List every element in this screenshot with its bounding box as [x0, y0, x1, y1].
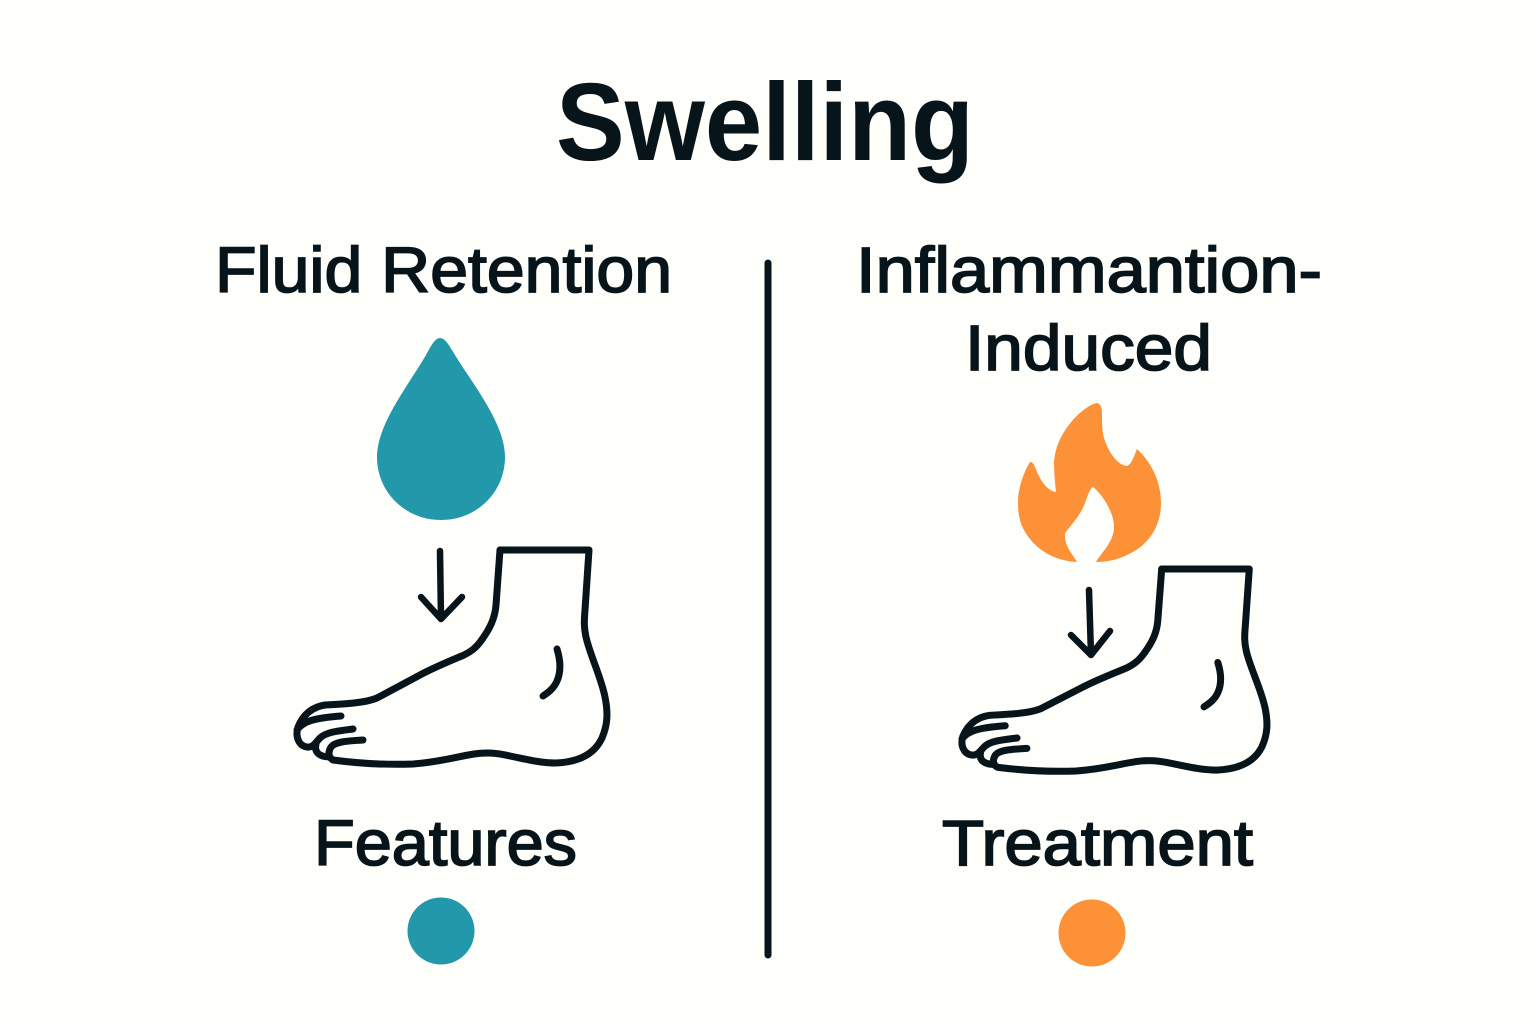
icon: water drop: [377, 338, 505, 520]
arrow: flame to foot: [1071, 590, 1110, 655]
heading: inflammantion-induced: Inflammantion-: [856, 234, 1322, 306]
heading: inflammantion-induced: Induced: [965, 312, 1212, 384]
dot: teal: [408, 898, 474, 964]
icon: foot: [962, 569, 1267, 771]
icon: foot: [297, 550, 607, 764]
panel: inflammation-induced: [856, 234, 1322, 966]
divider: [764, 263, 772, 955]
heading: fluid retention: Fluid Retention: [215, 234, 672, 306]
label: features: Features: [314, 807, 577, 879]
arrow: drop to foot: [421, 551, 462, 619]
icon: flame: [1018, 403, 1161, 562]
label: treatment: Treatment: [942, 807, 1253, 879]
panel: fluid retention: [215, 234, 672, 964]
heading: inflammantion-induced: [856, 234, 1322, 384]
title: Swelling: [556, 61, 974, 184]
dot: orange: [1058, 900, 1126, 966]
